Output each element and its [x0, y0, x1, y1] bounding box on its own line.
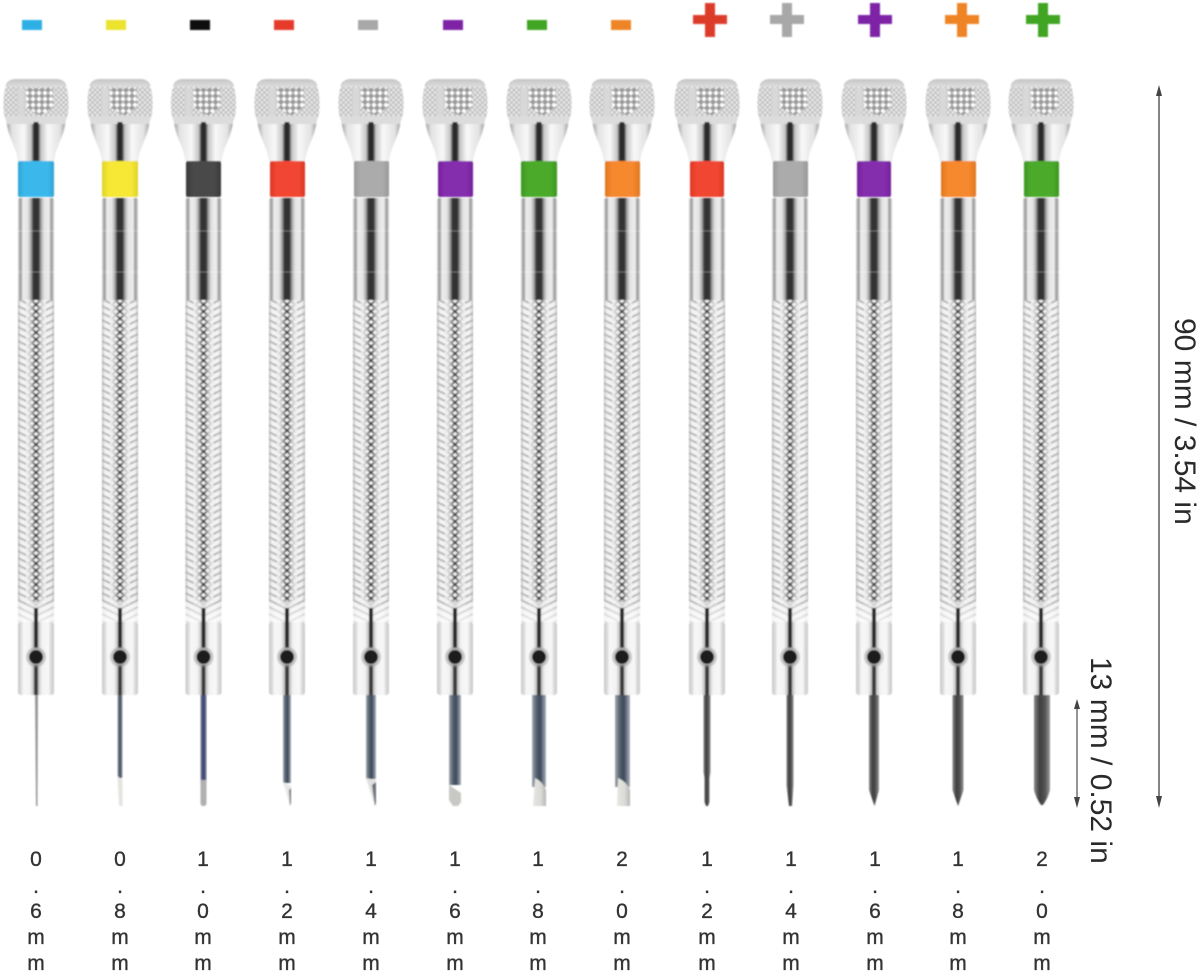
- tip: [869, 695, 879, 806]
- size 0.6 mm: .: [33, 875, 39, 898]
- arrow: overall length: [1156, 85, 1162, 808]
- screwdriver 1.8 mm cross, orange: [925, 79, 991, 806]
- screwdriver 1.0 mm slotted, black: [171, 79, 236, 806]
- cross swatch: red: [693, 3, 727, 37]
- size 1.8 mm cross: .: [955, 875, 961, 898]
- colour band: [521, 161, 557, 197]
- colour band: [690, 161, 724, 197]
- size 1.4 mm cross: .: [788, 875, 794, 898]
- size 1.8 mm: .: [535, 875, 541, 898]
- cross swatch: gray: [770, 3, 804, 37]
- size 0.8 mm: .: [117, 875, 123, 898]
- screwdriver 2.0 mm cross, green: [1008, 79, 1074, 805]
- slotted swatch: red: [274, 20, 294, 30]
- size 1.6 mm cross: m: [866, 926, 884, 949]
- size 1.2 mm: m: [278, 926, 296, 949]
- size 2.0 mm cross: m: [1033, 926, 1051, 949]
- size 1.8 mm: m: [529, 926, 547, 949]
- screwdriver 1.4 mm slotted, gray: [338, 79, 404, 806]
- slotted swatch: gray: [358, 20, 378, 30]
- colour band: [1024, 161, 1059, 197]
- legend: colour key row: [22, 3, 1060, 37]
- size 2.0 mm cross: .: [1039, 875, 1045, 898]
- size 1.6 mm: m: [446, 926, 464, 949]
- size 2.0 mm: .: [619, 875, 625, 898]
- size 1.2 mm: .: [284, 875, 290, 898]
- tip: [366, 695, 376, 806]
- size 1.6 mm cross: 6: [869, 900, 881, 923]
- size 1.2 mm: 2: [281, 900, 293, 923]
- tip: [283, 695, 291, 806]
- screwdriver 0.6 mm slotted, blue: [3, 79, 69, 806]
- tip: [786, 695, 794, 806]
- colour band: [438, 161, 473, 197]
- cross swatch: orange: [945, 3, 979, 37]
- screwdriver 0.8 mm slotted, yellow: [87, 79, 153, 806]
- colour band: [941, 161, 976, 197]
- colour band: [773, 161, 808, 197]
- size 0.8 mm: m: [111, 926, 129, 949]
- slotted swatch: orange: [611, 20, 631, 30]
- colour band: [354, 161, 389, 197]
- screwdriver 1.2 mm cross, red: [674, 79, 740, 806]
- size 1.6 mm: 6: [449, 900, 461, 923]
- screwdriver 1.6 mm slotted, purple: [422, 79, 488, 806]
- colour band: [102, 161, 138, 197]
- size 1.2 mm cross: m: [698, 926, 716, 949]
- size labels: [27, 848, 1051, 972]
- size 1.8 mm: 1: [532, 848, 544, 871]
- size 2.0 mm cross: 2: [1036, 848, 1048, 871]
- cross swatch: green: [1026, 3, 1060, 37]
- arrow: tip length: [1074, 699, 1080, 808]
- size 1.4 mm: m: [362, 926, 380, 949]
- size 1.2 mm cross: 2: [701, 900, 713, 923]
- colour band: [605, 161, 640, 197]
- size 1.0 mm: .: [200, 875, 206, 898]
- size 1.4 mm cross: 1: [785, 848, 797, 871]
- slotted swatch: yellow: [106, 20, 126, 30]
- size 1.8 mm cross: m: [949, 926, 967, 949]
- size 1.8 mm cross: 8: [952, 900, 964, 923]
- size 0.8 mm: 8: [114, 900, 126, 923]
- cross swatch: purple: [858, 3, 892, 37]
- colour band: [186, 161, 221, 197]
- slotted swatch: blue: [22, 20, 42, 30]
- size 0.6 mm: 6: [30, 900, 42, 923]
- size 1.6 mm cross: .: [872, 875, 878, 898]
- size 1.4 mm: .: [368, 875, 374, 898]
- tip: [532, 695, 546, 806]
- tip: [200, 695, 206, 806]
- size 1.2 mm: 1: [281, 848, 293, 871]
- size 2.0 mm: m: [613, 926, 631, 949]
- tip: [704, 695, 710, 806]
- colour band: [18, 161, 54, 197]
- tip: [1034, 695, 1050, 805]
- screwdriver 1.6 mm cross, purple: [841, 79, 907, 806]
- tip: [615, 695, 630, 806]
- size 1.4 mm: 1: [365, 848, 377, 871]
- size 2.0 mm: 2: [616, 848, 628, 871]
- colour band: [857, 161, 891, 197]
- slotted swatch: green: [527, 20, 547, 30]
- size 2.0 mm cross: 0: [1036, 900, 1048, 923]
- label: tip length: 13 mm / 0.52 in: [1084, 657, 1117, 864]
- size 1.6 mm cross: 1: [869, 848, 881, 871]
- size 1.4 mm: 4: [365, 900, 377, 923]
- size 1.2 mm cross: 1: [701, 848, 713, 871]
- size 2.0 mm: 0: [616, 900, 628, 923]
- size 1.6 mm: .: [452, 875, 458, 898]
- size 1.6 mm: 1: [449, 848, 461, 871]
- screwdriver 2.0 mm slotted, orange: [589, 79, 655, 806]
- size 1.0 mm: 0: [197, 900, 209, 923]
- screwdrivers: [3, 79, 1074, 806]
- size 1.0 mm: 1: [197, 848, 209, 871]
- screwdriver 1.2 mm slotted, red: [254, 79, 320, 806]
- screwdriver 1.8 mm slotted, green: [506, 79, 572, 806]
- slotted swatch: black: [190, 20, 210, 30]
- size 0.8 mm: 0: [114, 848, 126, 871]
- size 1.0 mm: m: [194, 926, 212, 949]
- size 1.8 mm: 8: [532, 900, 544, 923]
- slotted swatch: purple: [443, 20, 463, 30]
- size 1.4 mm cross: m: [782, 926, 800, 949]
- screwdriver 1.4 mm cross, gray: [757, 79, 823, 806]
- tip: [952, 695, 964, 806]
- tip: [35, 695, 38, 806]
- size 0.6 mm: 0: [30, 848, 42, 871]
- tip: [449, 695, 461, 806]
- tip: [118, 695, 122, 806]
- size 1.2 mm cross: .: [704, 875, 710, 898]
- size 1.4 mm cross: 4: [785, 900, 797, 923]
- size 0.6 mm: m: [27, 926, 45, 949]
- size 1.8 mm cross: 1: [952, 848, 964, 871]
- colour band: [270, 161, 305, 197]
